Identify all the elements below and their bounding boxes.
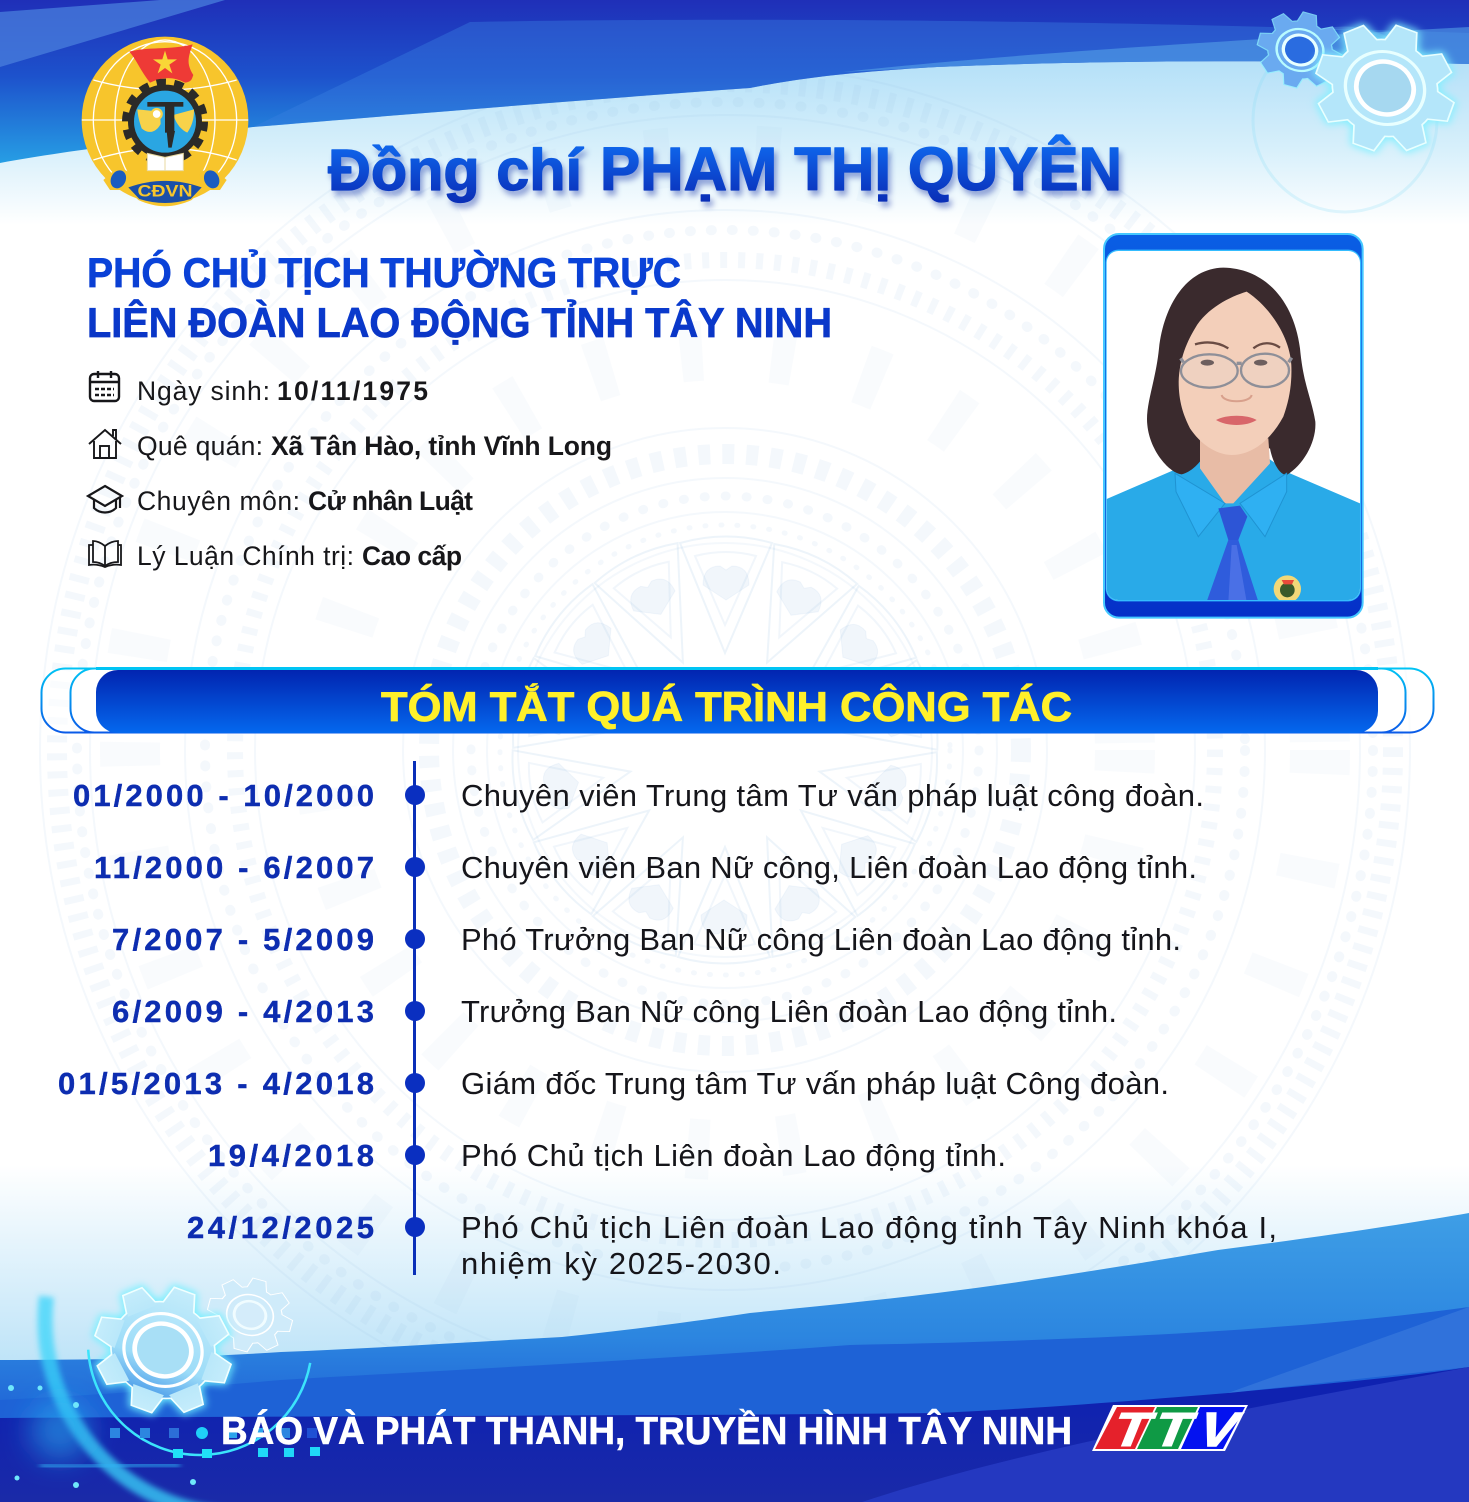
logo: TTV: V: [1189, 1404, 1248, 1457]
timeline entry 3: 7/2007 - 5/2009: [112, 922, 374, 957]
book: [147, 153, 183, 171]
political theory: Lý Luận Chính trị:: [137, 541, 354, 571]
profession: Cử nhân Luật: [308, 486, 473, 516]
icon: calendar: [90, 371, 119, 401]
logo: Công đoàn Việt Nam emblem: [82, 37, 248, 206]
gear: [126, 82, 204, 161]
timeline entry 1: Chuyên viên Trung tâm Tư vấn pháp luật công đoàn.: [461, 778, 1204, 813]
timeline entry 7: [187, 1210, 1277, 1281]
background: bottom light wash: [0, 1165, 1469, 1375]
ribbon: [103, 167, 227, 206]
timeline entry 4: 6/2009 - 4/2013: [112, 994, 374, 1029]
timeline entry 2: [94, 850, 1197, 885]
flag: [129, 44, 193, 83]
timeline entry 2: Chuyên viên Ban Nữ công, Liên đoàn Lao động tỉnh.: [461, 850, 1197, 885]
timeline entry 6: [208, 1138, 1006, 1173]
birth date: Ngày sinh:: [137, 376, 270, 406]
top blue wave banner: [0, 0, 1469, 163]
timeline entry 7: nhiệm kỳ 2025-2030.: [461, 1246, 781, 1281]
timeline entry 7: 24/12/2025: [187, 1210, 374, 1245]
portrait: [1107, 268, 1360, 603]
subtitle: position: [87, 248, 832, 346]
subtitle: position: LIÊN ĐOÀN LAO ĐỘNG TỈNH TÂY NINH: [87, 298, 832, 346]
timeline entry 6: Phó Chủ tịch Liên đoàn Lao động tỉnh.: [461, 1138, 1006, 1173]
logo: TTV: [1092, 1402, 1248, 1457]
icon: house: [89, 430, 121, 458]
political theory: Cao cấp: [362, 541, 462, 571]
portrait photo frame: [1104, 234, 1363, 618]
timeline entry 5: [58, 1066, 1169, 1101]
footer organisation name: BÁO VÀ PHÁT THANH, TRUYỀN HÌNH TÂY NINH: [221, 1409, 1072, 1453]
section header bar: [42, 667, 1434, 733]
icon: bottom-left small gear: [200, 1269, 300, 1361]
bottom blue wave banner: [0, 1213, 1469, 1502]
ribbon: CĐVN: [137, 182, 192, 201]
icon: top-right small gear: [1250, 3, 1350, 97]
decoration: bottom-left tech arcs and dots: [8, 1125, 435, 1502]
title: PHẠM THỊ QUYÊN: [600, 135, 1122, 203]
section heading: TÓM TẮT QUÁ TRÌNH CÔNG TÁC: [381, 682, 1072, 730]
timeline entry 3: [112, 922, 1181, 957]
profession: [137, 486, 473, 516]
logo: TTV: T: [1104, 1402, 1162, 1456]
icon: open book: [89, 541, 121, 567]
subtitle: position: PHÓ CHỦ TỊCH THƯỜNG TRỰC: [87, 248, 681, 296]
timeline entry 5: Giám đốc Trung tâm Tư vấn pháp luật Công đoàn.: [461, 1066, 1169, 1101]
timeline entry 3: Phó Trưởng Ban Nữ công Liên đoàn Lao động tỉnh.: [461, 922, 1181, 957]
political theory: [137, 541, 462, 571]
timeline axis: [413, 761, 416, 1275]
birth date: [137, 376, 428, 406]
title: Đồng chí: [328, 138, 584, 203]
birth date: 10/11/1975: [277, 376, 428, 406]
timeline entry 4: Trưởng Ban Nữ công Liên đoàn Lao động tỉnh.: [461, 994, 1117, 1029]
timeline entry 4: [112, 994, 1117, 1029]
timeline entry 7: Phó Chủ tịch Liên đoàn Lao động tỉnh Tây Ninh khóa I,: [461, 1210, 1277, 1245]
timeline entry 1: [73, 778, 1204, 813]
title: [328, 135, 1122, 203]
timeline entry 1: 01/2000 - 10/2000: [73, 778, 374, 813]
timeline entry 5: 01/5/2013 - 4/2018: [58, 1066, 374, 1101]
hometown: Quê quán:: [137, 431, 263, 461]
timeline entry 6: 19/4/2018: [208, 1138, 374, 1173]
icon: bottom-left large gear: [78, 1268, 248, 1432]
background: top light wash: [0, 50, 1469, 230]
profession: Chuyên môn:: [137, 486, 300, 516]
icon: graduation cap: [88, 486, 122, 512]
icon: top-right large gear: [1299, 6, 1469, 170]
logo: TTV: T: [1145, 1402, 1203, 1456]
timeline entry 2: 11/2000 - 6/2007: [94, 850, 374, 885]
decoration: top-right tech circle: [1253, 28, 1437, 212]
hometown: Xã Tân Hào, tỉnh Vĩnh Long: [271, 431, 612, 461]
